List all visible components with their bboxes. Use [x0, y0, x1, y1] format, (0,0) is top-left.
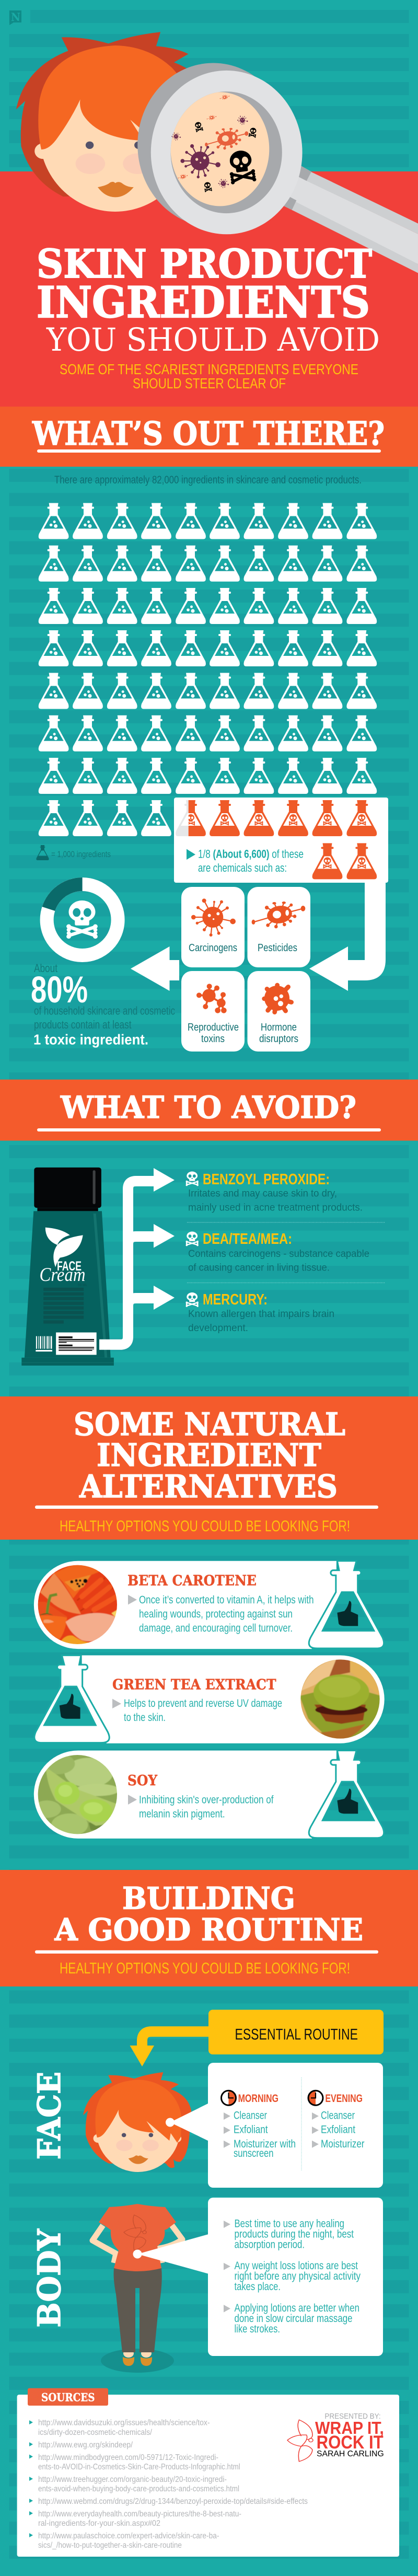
- icon: germs and skulls in lens: [171, 95, 257, 192]
- heading: sources tab: SOURCES: [41, 2390, 95, 2404]
- heading: building a good routine: A GOOD ROUTINE: [54, 1912, 363, 1947]
- card: soy: [33, 1750, 384, 1839]
- panel: body routine: products during the night, best: [234, 2228, 354, 2240]
- photo: carrots and papaya: [38, 1565, 117, 1644]
- illustration: woman's face: [16, 32, 211, 212]
- card: soy: melanin skin pigment.: [139, 1808, 225, 1820]
- ingredient: DEA TEA MEA: DEA/TEA/MEA:: [203, 1231, 292, 1247]
- panel: red title background: [0, 171, 418, 407]
- card: pesticides: Pesticides: [258, 942, 297, 954]
- panel: sources: [17, 2388, 399, 2557]
- legend: = 1,000 ingredients: [51, 849, 111, 859]
- icon: publisher logo: N: [11, 10, 20, 24]
- subtitle: SOME OF THE SCARIEST INGREDIENTS EVERYONE: [60, 361, 358, 377]
- panel: sources: ral-ingredients-for-your-skin.aspx#02: [38, 2519, 160, 2528]
- card: green tea extract: to the skin.: [124, 1712, 166, 1724]
- heading: natural alternatives: SOME NATURAL: [74, 1406, 345, 1443]
- ingredient: DEA TEA MEA: of causing cancer in living tissue.: [188, 1263, 330, 1274]
- panel: sources: http://www.webmd.com/drugs/2/drug-1344/benzoyl-peroxide-top/details#side-effects: [38, 2497, 308, 2506]
- title: INGREDIENTS: [37, 278, 370, 328]
- card: reproductive toxins: [181, 971, 245, 1052]
- card: beta carotene: BETA CAROTENE: [127, 1573, 257, 1589]
- panel: toxic flasks: are chemicals such as:: [198, 861, 287, 874]
- photo: matcha powder: [300, 1659, 380, 1739]
- chart: flask pictogram: [39, 503, 377, 836]
- card: hormone disruptors: [248, 971, 310, 1052]
- text: 80 percent statistic: 1 toxic ingredient.: [33, 1032, 148, 1048]
- text: 80 percent statistic: About: [34, 962, 57, 975]
- card: reproductive toxins: Reproductive: [188, 1022, 239, 1033]
- subtitle: [60, 361, 358, 391]
- ingredient: mercury: Known allergen that impairs brain: [188, 1309, 334, 1320]
- card: beta carotene: Once it’s converted to vitamin A, it helps with: [139, 1594, 314, 1606]
- panel: sources: http://www.everydayhealth.com/beauty-pictures/the-8-best-natu-: [38, 2510, 241, 2519]
- panel: sources: http://www.mindbodygreen.com/0-5971/12-Toxic-Ingredi-: [38, 2453, 218, 2462]
- panel: sources: http://www.davidsuzuki.org/issues/health/science/tox-: [38, 2419, 210, 2428]
- photo: edamame: [38, 1755, 117, 1834]
- card: carcinogens: [181, 887, 245, 967]
- heading: natural alternatives: ALTERNATIVES: [79, 1469, 338, 1505]
- illustration: face cream tube: 50 ML: [78, 1284, 87, 1287]
- heading: what's out there: [0, 407, 418, 467]
- panel: body routine: takes place.: [234, 2281, 281, 2293]
- arrow: panel to chemicals: [309, 883, 386, 991]
- panel: sources: http://www.ewg.org/skindeep/: [38, 2441, 133, 2450]
- heading: building a good routine: [0, 1870, 418, 1986]
- illustration: magnifying glass: [137, 63, 418, 273]
- panel: body routine: done in slow circular massage: [234, 2313, 352, 2325]
- panel: face routine: Exfoliant: [234, 2124, 268, 2136]
- heading: natural alternatives: INGREDIENT: [97, 1437, 321, 1474]
- card: reproductive toxins: toxins: [201, 1033, 225, 1045]
- card: green tea extract: Helps to prevent and reverse UV damage: [124, 1697, 282, 1709]
- ingredient: mercury: MERCURY:: [203, 1291, 268, 1308]
- logo: wrap it rock it: SARAH CARLING: [317, 2450, 384, 2458]
- logo: wrap it rock it: WRAP IT,: [315, 2418, 384, 2438]
- legend: [36, 845, 111, 860]
- panel: body routine: Applying lotions are better when: [234, 2302, 359, 2314]
- panel: toxic flasks: 1/8 (About 6,600) of these: [198, 848, 304, 860]
- card: hormone disruptors: Hormone: [261, 1022, 297, 1033]
- heading: building a good routine: BUILDING: [122, 1881, 295, 1916]
- title: YOU SHOULD AVOID: [46, 321, 380, 359]
- panel: face routine: EVENING: [325, 2093, 363, 2105]
- icon: morning clock: [222, 2090, 236, 2105]
- panel: sources: http://www.treehugger.com/organic-beauty/20-toxic-ingredi-: [38, 2475, 227, 2484]
- ingredient: benzoyl peroxide: [186, 1171, 363, 1214]
- heading: what to avoid: WHAT TO AVOID?: [60, 1090, 356, 1125]
- panel: body routine: Any weight loss lotions are best: [234, 2260, 358, 2272]
- panel: face routine: Moisturizer with: [234, 2138, 296, 2150]
- panel: toxic flasks: [174, 798, 388, 883]
- panel: body routine: Best time to use any healing: [234, 2218, 344, 2230]
- heading: what to avoid: [0, 1080, 418, 1141]
- panel: face routine: sunscreen: [234, 2147, 274, 2159]
- card: beta carotene: damage, and encouraging cell turnover.: [139, 1622, 293, 1634]
- title: [37, 241, 380, 359]
- ingredient: DEA TEA MEA: Contains carcinogens - substance capable: [188, 1249, 369, 1260]
- ingredient: benzoyl peroxide: Irritates and may cause skin to dry,: [188, 1188, 337, 1199]
- panel: sources: sics/_/how-to-put-together-a-skin-care-routine: [38, 2541, 182, 2550]
- text: 80 percent statistic: products contain at least: [34, 1018, 132, 1031]
- panel: sources: ics/dirty-dozen-cosmetic-chemicals/: [38, 2428, 153, 2437]
- heading: sources tab: [28, 2388, 108, 2406]
- card: hormone disruptors: disruptors: [259, 1033, 298, 1045]
- logo: wrap it rock it: PRESENTED BY:: [324, 2412, 381, 2421]
- label: face: FACE: [31, 2072, 68, 2159]
- card: carcinogens: Carcinogens: [189, 942, 237, 954]
- illustration: body: [92, 2204, 182, 2373]
- panel: face routine: MORNING: [238, 2093, 278, 2105]
- logo: wrap it rock it: ROCK IT: [317, 2432, 384, 2453]
- ingredient: benzoyl peroxide: mainly used in acne treatment products.: [188, 1202, 363, 1214]
- panel: body routine: right before any physical activity: [234, 2270, 361, 2282]
- label: body: BODY: [31, 2228, 68, 2328]
- panel: face routine: [166, 2063, 383, 2188]
- panel: body routine: absorption period.: [234, 2239, 305, 2250]
- panel: sources: ents-to-AVOID-in-Cosmetics-Skin-Care-Products-Infographic.html: [38, 2463, 240, 2471]
- logo: wrap it rock it: [287, 2412, 384, 2462]
- arrow: chemicals to statistic: [131, 946, 179, 991]
- illustration: face cream tube: Cream: [40, 1264, 86, 1286]
- heading: natural alternatives: [0, 1396, 418, 1540]
- chart: donut 80 percent: [42, 877, 118, 955]
- arrow: tube to ingredients: [99, 1168, 175, 1345]
- icon: evening clock: [308, 2090, 323, 2105]
- card: beta carotene: [34, 1561, 384, 1649]
- panel: body routine: like strokes.: [234, 2323, 280, 2335]
- illustration: face: [83, 2072, 191, 2172]
- card: green tea extract: [34, 1655, 385, 1743]
- subtitle: SHOULD STEER CLEAR OF: [133, 375, 286, 391]
- illustration: face cream tube: [21, 1168, 114, 1366]
- arrow: essential routine to face: [130, 2031, 209, 2066]
- panel: face routine: Cleanser: [321, 2109, 355, 2122]
- ingredient: mercury: development.: [188, 1323, 248, 1334]
- panel: face routine: Moisturizer: [321, 2138, 365, 2150]
- title: SKIN PRODUCT: [37, 241, 372, 287]
- panel: face routine: Exfoliant: [321, 2124, 355, 2136]
- card: green tea extract: GREEN TEA EXTRACT: [112, 1677, 276, 1693]
- card: pesticides: [248, 887, 310, 967]
- text: 80 percent statistic: [31, 962, 175, 1048]
- panel: body routine: [133, 2198, 383, 2356]
- ingredient: benzoyl peroxide: BENZOYL PEROXIDE:: [203, 1171, 330, 1188]
- illustration: face cream tube: FACE: [57, 1259, 82, 1274]
- ingredient: mercury: [186, 1291, 334, 1334]
- callout: essential routine: [208, 2010, 384, 2054]
- panel: sources: ents-avoid-when-buying-body-care-products-and-cosmetics.html: [38, 2485, 239, 2493]
- callout: essential routine: ESSENTIAL ROUTINE: [235, 2026, 358, 2043]
- panel: sources: http://www.paulaschoice.com/expert-advice/skin-care-ba-: [38, 2532, 219, 2540]
- text: 80 percent statistic: 80%: [31, 969, 88, 1011]
- ingredient: DEA TEA MEA: [186, 1231, 369, 1274]
- card: beta carotene: healing wounds, protecting against sun: [139, 1608, 293, 1620]
- card: soy: SOY: [127, 1773, 158, 1789]
- panel: face routine: Cleanser: [234, 2109, 267, 2122]
- text: 80 percent statistic: of household skincare and cosmetic: [34, 1004, 175, 1017]
- card: soy: Inhibiting skin's over-production of: [139, 1794, 274, 1806]
